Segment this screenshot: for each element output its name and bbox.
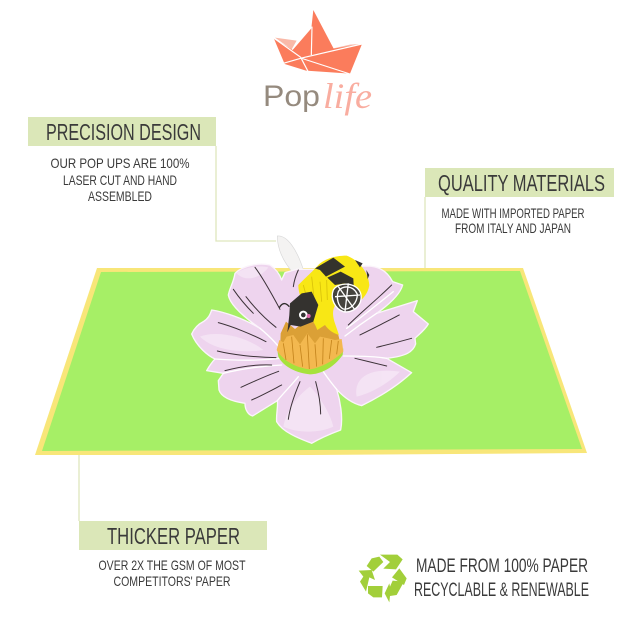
callout: thicker paper	[79, 521, 267, 589]
leader line: thicker paper	[78, 455, 80, 521]
bee and flower centre, local coordinates	[277, 256, 369, 374]
leader line: quality materials	[424, 197, 426, 270]
heading: PRECISION DESIGN	[46, 119, 201, 145]
body text	[50, 155, 190, 204]
body text: OUR POP UPS ARE 100%	[50, 155, 190, 171]
callout: quality materials	[425, 168, 614, 236]
petal markings	[217, 267, 412, 419]
heading band	[79, 521, 267, 550]
petal shading	[200, 266, 400, 432]
green centre base	[277, 348, 343, 374]
pop-up card	[35, 236, 587, 455]
callout: precision design	[28, 117, 216, 204]
heading: THICKER PAPER	[107, 523, 240, 549]
flower petals	[192, 264, 428, 443]
wing front	[332, 283, 361, 312]
stamen ribs	[283, 334, 338, 369]
wing back	[277, 236, 304, 275]
bee stripes	[315, 258, 369, 292]
front stamens	[277, 333, 343, 369]
back stamens	[280, 317, 342, 365]
recycling statement	[414, 556, 589, 601]
body pleats	[303, 277, 327, 307]
body text	[98, 557, 246, 589]
icon: recycling symbol	[359, 555, 407, 602]
body text: LASER CUT AND HAND	[63, 172, 177, 188]
body text: FROM ITALY AND JAPAN	[455, 220, 571, 236]
card green face	[42, 271, 582, 451]
bee head	[287, 292, 318, 332]
leader line: precision design	[216, 146, 276, 241]
bee eye	[299, 311, 311, 319]
logo word: life: life	[323, 76, 372, 116]
card yellow backing	[35, 268, 587, 455]
flower and bee	[192, 236, 428, 443]
petal highlights	[215, 292, 393, 401]
body text	[442, 205, 584, 236]
body text: OVER 2X THE GSM OF MOST	[98, 557, 246, 573]
icon: origami boat	[274, 10, 362, 74]
body text: COMPETITORS' PAPER	[114, 573, 230, 589]
heading band	[425, 168, 614, 197]
logo word: Pop: Pop	[263, 80, 320, 113]
heading band	[28, 117, 216, 146]
antenna	[279, 304, 289, 308]
bee body	[298, 256, 369, 335]
body text: ASSEMBLED	[88, 188, 152, 204]
logo: Poplife	[263, 10, 372, 116]
